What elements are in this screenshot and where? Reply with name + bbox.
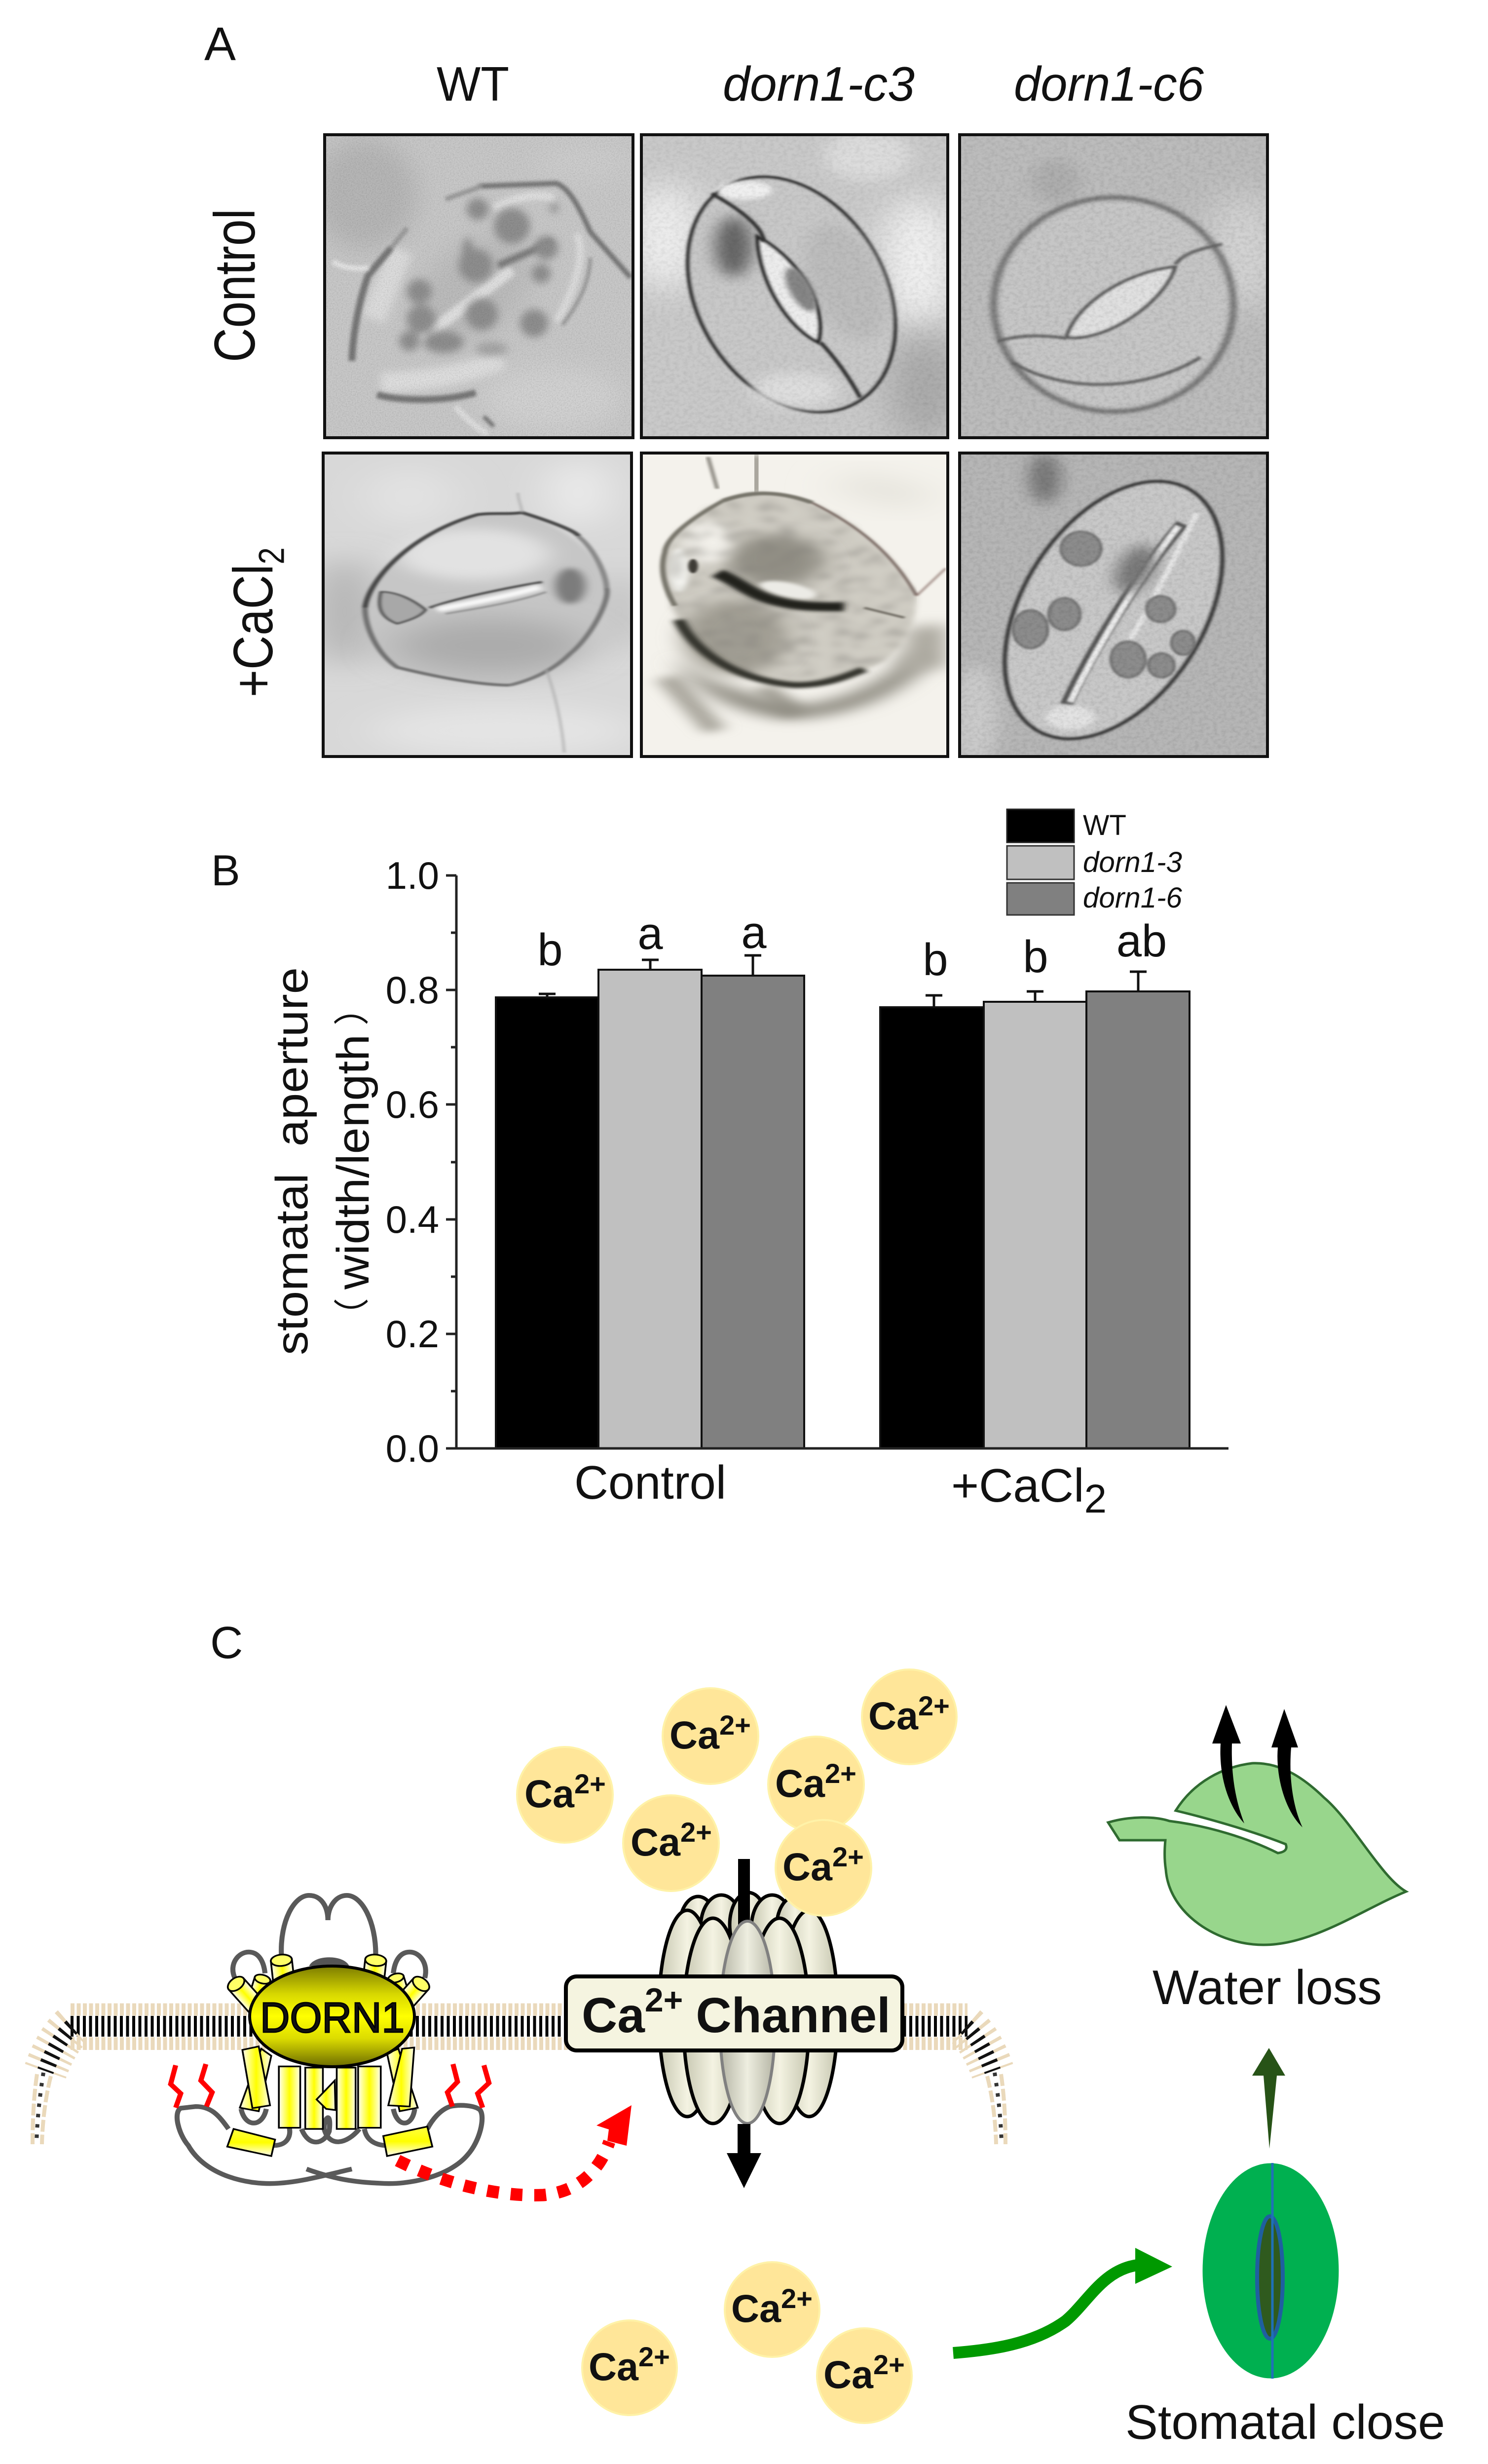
calcium ions outside: 2+ (825, 1758, 856, 1789)
bar: CaCl2 dorn1-3 (984, 1002, 1086, 1448)
panel A: stomata micrographs (202, 18, 1280, 765)
water loss label: Water loss (1153, 1960, 1382, 2014)
panel label A: A (204, 18, 236, 71)
y-axis tick labels: 0.0 (386, 1427, 439, 1470)
bars (496, 970, 1190, 1448)
calcium ions outside (517, 1669, 957, 1916)
legend: dorn1-3 (1083, 846, 1182, 878)
calcium ions inside: 2+ (781, 2283, 813, 2314)
calcium ions inside: Ca (589, 2345, 638, 2388)
significance letters: ab (1116, 916, 1167, 966)
calcium ions outside: 2+ (719, 1709, 751, 1741)
column heading dorn1-c3: dorn1-c3 (723, 57, 915, 111)
calcium ions inside: Ca (823, 2352, 873, 2396)
arrow: DORN1 activates channel (398, 2105, 632, 2195)
water vapour arrow left (1212, 1705, 1244, 1823)
bar: Control dorn1-3 (598, 970, 702, 1448)
panel label B: B (211, 846, 240, 895)
row label +CaCl2: 2 (252, 547, 292, 565)
bar: Control dorn1-6 (702, 976, 804, 1448)
calcium ions inside: Ca (731, 2286, 781, 2330)
calcium ions outside: Ca (524, 1772, 574, 1816)
stomata icon (1203, 2163, 1339, 2379)
membrane bilayer (33, 2009, 1005, 2144)
y-axis tick labels: 1.0 (386, 854, 439, 897)
calcium ions inside (582, 2262, 912, 2423)
calcium ions outside: 2+ (832, 1841, 864, 1872)
x-axis label +CaCl2: 2 (1084, 1477, 1107, 1521)
calcium ions inside: 2+ (638, 2341, 670, 2372)
calcium ions outside: 2+ (680, 1817, 712, 1848)
micrographs: dorn1 control and dorn1-c6 CaCl2 (629, 131, 1280, 765)
column heading dorn1-c6: dorn1-c6 (1014, 57, 1204, 111)
micrograph: WT control (313, 136, 632, 438)
column heading WT: WT (437, 57, 509, 111)
DORN1 ellipse label (250, 1966, 414, 2067)
micrograph: dorn1-c3 control (643, 136, 946, 436)
calcium channel label (566, 1976, 902, 2050)
significance letters: a (741, 908, 767, 958)
calcium ions outside: Ca (775, 1761, 825, 1805)
y-axis title: stomatal aperture (267, 967, 317, 1355)
significance letters (537, 908, 1167, 985)
calcium ions outside: 2+ (918, 1690, 950, 1721)
calcium ions outside: Ca (782, 1845, 832, 1889)
y-axis tick labels: 0.6 (386, 1083, 439, 1126)
DORN1 receptor (171, 1895, 489, 2184)
water vapour arrow right (1271, 1709, 1302, 1827)
green curved arrow (953, 2248, 1172, 2353)
y-axis subtitle: ） (333, 990, 372, 1025)
dark green arrow (1252, 2048, 1285, 2149)
calcium ions outside: Ca (631, 1820, 680, 1864)
significance letters: b (923, 935, 948, 985)
error bars (539, 955, 1147, 1007)
calcium ions outside: Ca (868, 1694, 918, 1738)
legend (1007, 809, 1183, 915)
micrograph: WT CaCl2 (317, 454, 634, 757)
leaf icon (1108, 1705, 1406, 1945)
row label +CaCl2: +CaCl (223, 565, 285, 697)
calcium channel label: Channel (696, 1988, 891, 2043)
axes (446, 875, 1228, 1448)
calcium channel label: 2+ (645, 1981, 683, 2019)
DORN1 receptor: DORN1 (260, 1994, 405, 2042)
micrograph: dorn1-c3 CaCl2 (642, 454, 946, 757)
bar: CaCl2 dorn1-6 (1086, 991, 1190, 1448)
x-axis label +CaCl2: +CaCl (951, 1459, 1084, 1512)
panel B: bar chart of stomatal aperture (211, 809, 1228, 1521)
calcium ions inside: 2+ (873, 2349, 905, 2380)
stomatal close label: Stomatal close (1125, 2395, 1445, 2449)
panel C: signalling model (33, 1618, 1445, 2449)
y-axis tick labels (386, 854, 439, 1470)
calcium ions outside: Ca (670, 1713, 719, 1757)
bar: CaCl2 WT (880, 1007, 984, 1448)
y-axis tick labels: 0.8 (386, 968, 439, 1012)
significance letters: b (537, 925, 563, 975)
x-axis label Control: Control (574, 1456, 726, 1509)
y-axis subtitle: （ (333, 1298, 372, 1333)
y-axis subtitle: width/length (328, 1034, 378, 1290)
micrograph: dorn1-c6 CaCl2 (954, 453, 1268, 765)
y-axis tick labels: 0.4 (386, 1198, 439, 1241)
significance letters: b (1023, 932, 1048, 982)
row label Control: Control (202, 209, 267, 362)
panel label C: C (210, 1618, 243, 1668)
calcium channel label: Ca (582, 1988, 645, 2043)
legend: WT (1083, 809, 1126, 841)
micrograph frames (323, 135, 1267, 757)
bar: Control WT (496, 997, 598, 1448)
arrow: calcium influx (727, 2124, 761, 2188)
calcium channel (659, 1859, 838, 2123)
y-axis tick labels: 0.2 (386, 1312, 439, 1356)
legend: dorn1-6 (1083, 882, 1183, 914)
significance letters: a (637, 909, 663, 959)
calcium ions outside: 2+ (574, 1768, 606, 1799)
micrograph: dorn1-c6 control (960, 135, 1280, 438)
